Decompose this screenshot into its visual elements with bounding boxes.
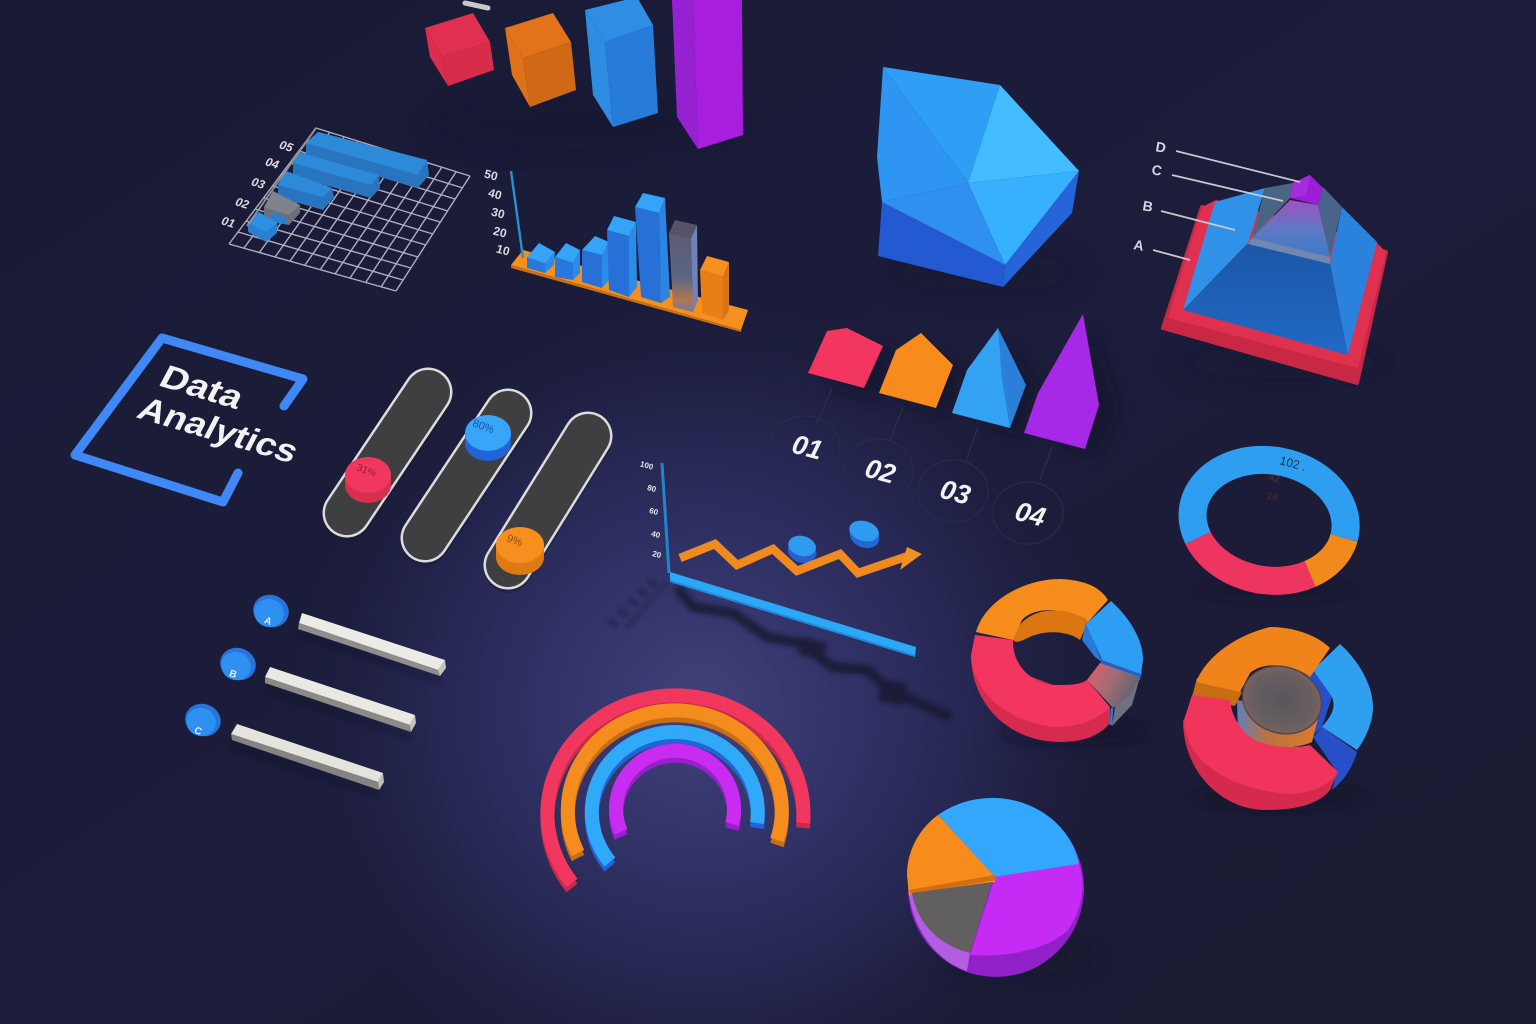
bar chart axis labels: 04 [264,154,281,172]
ring chart with 102 label: 42. [1267,472,1284,486]
title: Data Analytics: Data [153,358,252,416]
disc: 80% [465,415,511,461]
axis labels: 20 [651,549,663,560]
pyramid chart [1132,138,1395,383]
data discs [788,545,816,563]
column chart axis labels: 50 [483,167,500,184]
disc: 9%: 9% [505,533,524,549]
bar chart axis labels: 01 [220,213,237,231]
pyramid chart: A [1132,236,1145,254]
pyramid labels [1153,151,1300,260]
pyramid chart: D [1154,138,1167,156]
column chart on orange base [483,167,748,332]
column chart axis labels: 40 [487,186,504,203]
number badges [770,416,1063,544]
connector lines [817,388,1052,480]
grid [229,128,470,291]
disc: 9% [496,527,544,575]
blue slice [938,798,1079,877]
bar chart axis labels: 05 [278,137,295,155]
token B [216,643,260,685]
ring chart with 102 label: 102 . [1278,453,1308,474]
numbered pyramid shapes 01–04: 02 [862,453,899,490]
red segment [971,655,1110,742]
pyramid chart: C [1150,161,1163,179]
token A: A [263,615,273,628]
red segment [1183,720,1338,810]
numbered pyramid shapes 01–04 [770,314,1120,544]
token B: B [228,668,238,681]
3D column chart at top [425,0,750,149]
orange slice [907,815,995,896]
bars 05 to 01 [248,132,429,242]
column chart axis labels: 10 [495,242,512,259]
blue side [1313,727,1357,790]
bar chart axis labels: 03 [250,174,267,192]
ring chart with 102 label [1190,453,1360,602]
slider capsules [345,392,588,575]
pie chart with glass slice [907,798,1100,977]
blue top [1313,644,1373,750]
donut chart with glass slice [971,579,1150,744]
numbered pyramid shapes 01–04: 04 [1012,496,1049,533]
ring chart with 102 label: 16. [1265,490,1282,504]
blue segment [1082,622,1102,662]
column chart axis labels: 20 [492,224,509,241]
pie side [908,799,1084,977]
orange segment [1192,678,1242,706]
donut chart with glass cylinder [1183,627,1373,810]
orange trend arrow [680,544,908,573]
numbered pyramid shapes 01–04: 03 [937,474,974,511]
title: Data Analytics [75,338,305,502]
legend bars with blue tokens [181,590,446,798]
lavender glass rim [909,893,970,971]
icon: blue polyhedron [877,67,1080,290]
axis labels [639,460,663,560]
bar chart axis labels [220,137,295,231]
rainbow arc chart [547,695,803,888]
disc: 31%: 31% [355,462,378,480]
cylinder [1234,656,1330,748]
axis labels: 40 [650,529,662,540]
orange segment [1013,610,1088,642]
glass segment [1112,677,1140,726]
chart shadow [609,581,950,717]
disc: 80%: 80% [471,418,496,436]
numbered pyramid shapes 01–04: 01 [789,429,826,466]
axis labels: 100 [639,460,655,472]
bar chart axis labels: 02 [234,194,251,212]
axis labels: 60 [648,506,660,517]
token C [181,699,225,741]
purple slice [970,864,1082,956]
token A [249,590,293,632]
column chart axis labels [483,167,512,259]
disc: 31% [345,457,391,503]
axis labels: 80 [646,483,658,494]
column chart axis labels: 30 [490,205,507,222]
line chart with arrow [609,460,950,717]
glass slice [912,882,992,953]
pyramid chart: B [1141,197,1154,215]
horizontal bar chart on grid [220,128,470,291]
token C: C [193,725,203,738]
title: Data Analytics: Analytics [131,391,305,470]
